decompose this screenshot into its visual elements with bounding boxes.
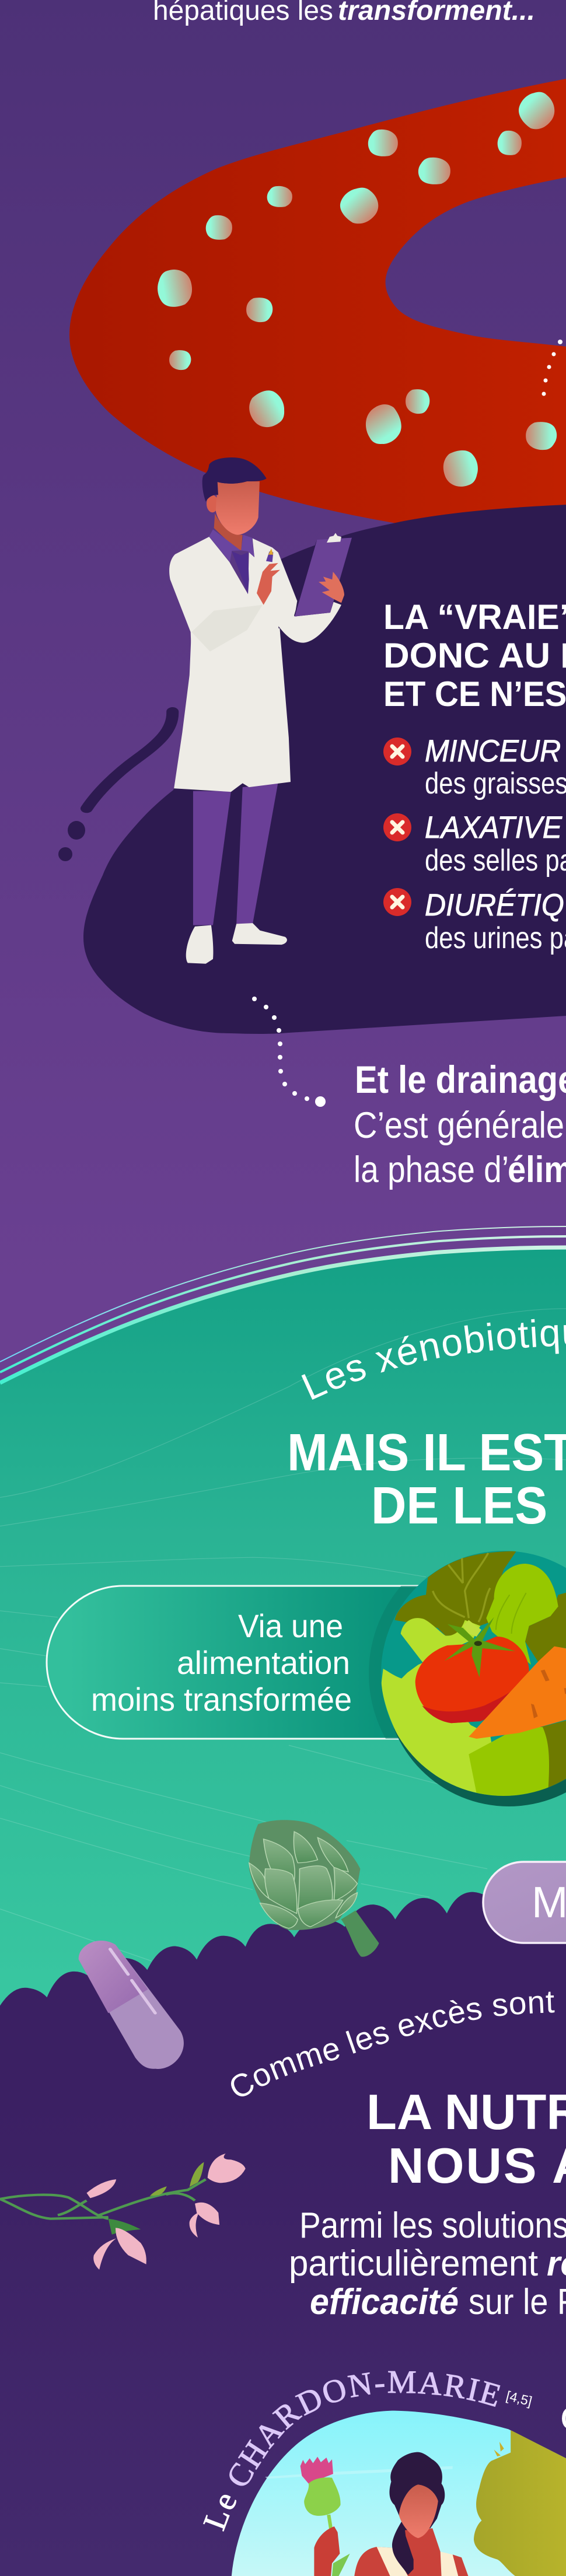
icon: cross [383,738,411,766]
lettuce veins [433,1553,490,1622]
thistle flower [301,2457,341,2516]
coat shading [191,605,263,652]
tree [474,2430,566,2576]
icon: cross [383,813,411,841]
salad drop shadow [385,1559,566,1806]
reference: [4,5] [505,2388,534,2409]
food pill text [91,1607,352,1718]
liver channel with particles [69,79,566,523]
list: minceur: des graisses [425,767,566,801]
green heading [287,1423,566,1535]
doctor neck [214,513,243,550]
blossoms [86,2154,246,2270]
thistle leaf [332,2554,350,2576]
list: laxative: LAXATIVE [425,810,562,844]
nutrition heading [366,2085,566,2194]
icon: flowering branch [0,2154,246,2270]
salad illustration [381,1551,566,1813]
clipboard [294,533,352,617]
woman's face [399,2484,438,2538]
icon: capsule [79,1941,184,2069]
green heading: MAIS IL EST [287,1423,566,1482]
tree sprout [494,2442,504,2456]
salad shadow ring [369,1586,418,1739]
particles [155,85,561,491]
food pill text: Via une [238,1607,343,1644]
sky [232,2411,566,2576]
woman's hair [389,2452,445,2575]
green section [0,1226,566,2042]
green lettuce [486,1564,558,1665]
lower green lettuce [469,1727,549,1796]
nutrition paragraph [289,2205,566,2322]
list: minceur: MINCEUR [425,733,561,768]
icon: cross [383,888,411,916]
food pill [46,1585,419,1740]
doctor ear [207,495,218,512]
carrot [469,1647,566,1739]
doctor upper coat [169,537,341,658]
doctor shoes [186,923,287,964]
doctor illustration [169,457,352,964]
nutrition paragraph: particulièrement [289,2243,538,2284]
list: laxative [383,810,566,878]
icon: artichoke [249,1820,379,1957]
doctor hair [202,457,267,502]
nutrition paragraph: efficacité [310,2282,459,2322]
dark purple section with scalloped edge [0,1872,566,2576]
drainage text: la phase d’ [354,1148,509,1190]
doctor face [216,481,260,535]
curved stripes [0,1226,566,1383]
dotted trail [541,340,562,396]
leaves [109,2162,204,2235]
supplement button [483,1862,566,1943]
green heading: DE LES [371,1476,547,1535]
food pill text: alimentation [177,1644,350,1681]
milk thistle illustration [232,2411,566,2576]
clouds [265,2466,453,2479]
thistle stem [329,2515,331,2530]
woman's hair strand [392,2519,414,2575]
list: diuretique [383,887,566,955]
woman's body [354,2528,468,2576]
tomato stem [445,1617,515,1677]
drainage text [354,1059,566,1190]
dark panel: true detox [83,505,566,1034]
food pill text: moins transformée [91,1681,352,1718]
doctor hands [257,563,344,605]
pencil [266,548,273,562]
tomato [415,1637,529,1723]
list: minceur [383,733,566,801]
dotted arrow to drainage [252,997,326,1107]
dark lettuce [395,1551,516,1635]
detox heading [383,597,566,714]
branch stems [0,2179,206,2219]
milk thistle title: Le CHARDON-MARIE [203,2371,501,2532]
intro sentence [153,0,535,26]
woman's hand [314,2526,340,2576]
nutrition paragraph: Parmi les solutions [299,2205,566,2246]
doctor shirt and collar [209,529,254,594]
light lettuce [381,1618,500,1795]
doctor lower coat [174,628,291,792]
doctor legs [193,783,278,925]
squiggle decoration [58,712,173,861]
